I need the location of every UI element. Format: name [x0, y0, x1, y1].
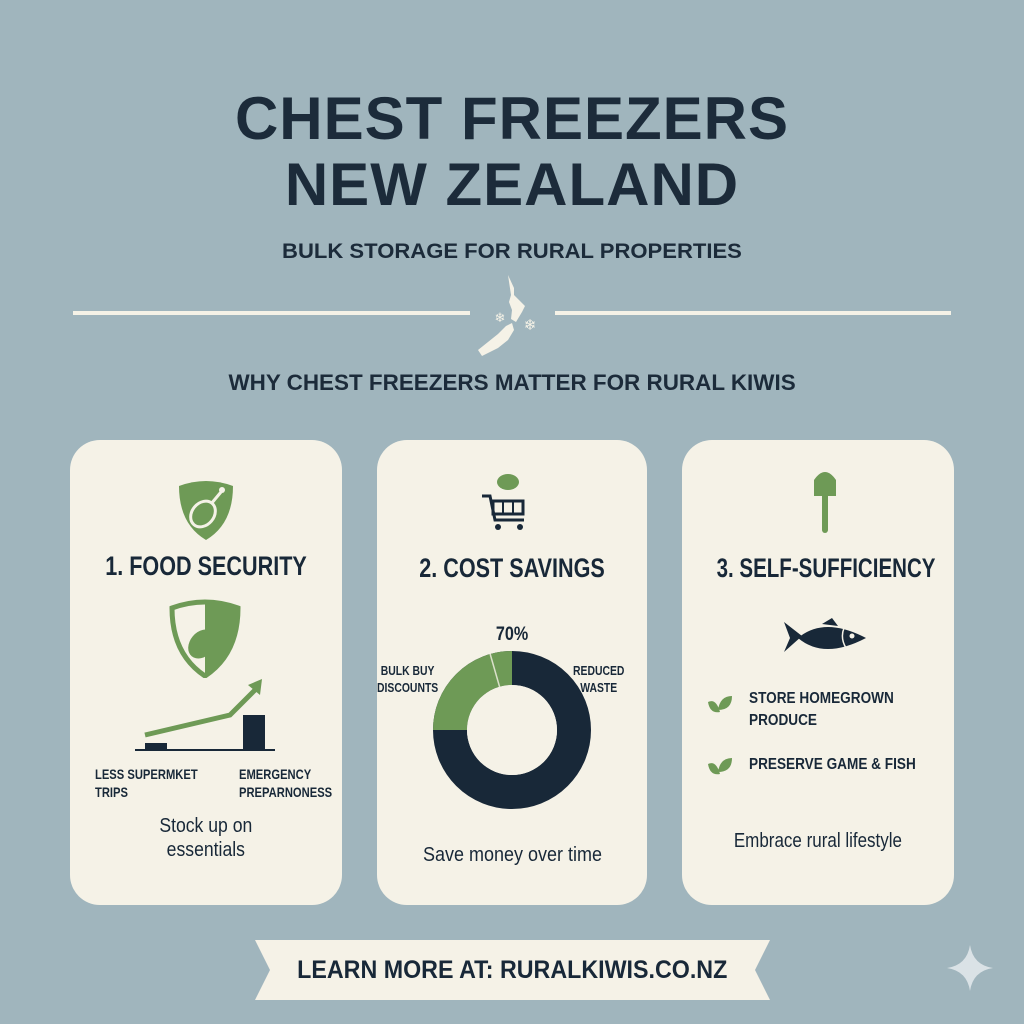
- panel: food security: PREPARNONESS: [239, 784, 332, 800]
- banner: learn more: [255, 940, 770, 1000]
- caption: [160, 815, 252, 861]
- list item: homegrown: PRODUCE: [749, 712, 817, 729]
- caption: Embrace rural lifestyle: [734, 830, 902, 852]
- icon: sparkle: [948, 946, 992, 990]
- icon: cart with piggy bank: [482, 474, 524, 530]
- list item: homegrown: STORE HOMEGROWN: [749, 690, 894, 707]
- divider with NZ map: [73, 275, 951, 356]
- icon: NZ map: [478, 275, 536, 356]
- heading: 1. FOOD SECURITY: [105, 551, 307, 581]
- donut labels: 70%: [496, 624, 528, 645]
- icon: shovel: [814, 472, 836, 533]
- panel: cost savings: WASTE: [580, 680, 617, 695]
- panel: food security: [70, 440, 342, 905]
- chart labels: [95, 766, 198, 800]
- caption: Save money over time: [422, 844, 602, 866]
- bar chart with arrow: [135, 679, 275, 751]
- chart labels: LESS SUPERMKET: [95, 766, 198, 782]
- chart labels: TRIPS: [95, 784, 128, 800]
- panel: cost savings: BULK BUY: [381, 663, 434, 678]
- banner: learn more: LEARN MORE AT: RURALKIWIS.CO.NZ: [297, 956, 728, 984]
- icon: shield drumstick: [179, 481, 233, 540]
- title: NEW ZEALAND: [285, 151, 739, 218]
- title: CHEST FREEZERS: [235, 85, 789, 152]
- panel: self-sufficiency: [682, 440, 954, 905]
- section heading: WHY CHEST FREEZERS MATTER FOR RURAL KIWIS: [228, 370, 796, 395]
- icon: leaf: [708, 696, 732, 712]
- panel: food security: EMERGENCY: [239, 766, 311, 782]
- icon: fish: [784, 618, 866, 652]
- list item: homegrown: [708, 690, 894, 729]
- caption: Stock up on: [160, 815, 252, 837]
- icon: leaf: [708, 758, 732, 774]
- subtitle: BULK STORAGE FOR RURAL PROPERTIES: [282, 240, 742, 263]
- title: [235, 85, 789, 218]
- panel: cost savings: REDUCED: [573, 663, 624, 678]
- panel: cost savings: DISCOUNTS: [377, 680, 438, 695]
- heading: 2. COST SAVINGS: [419, 553, 605, 583]
- panel: cost savings: [377, 440, 647, 905]
- icon: NZ map: ❄: [524, 317, 536, 334]
- icon: NZ map: ❄: [495, 310, 505, 325]
- caption: essentials: [167, 839, 245, 861]
- heading: 3. SELF-SUFFICIENCY: [717, 553, 935, 583]
- list item: game fish: PRESERVE GAME & FISH: [749, 756, 916, 773]
- icon: shield large: [170, 600, 240, 678]
- donut chart: [433, 651, 591, 809]
